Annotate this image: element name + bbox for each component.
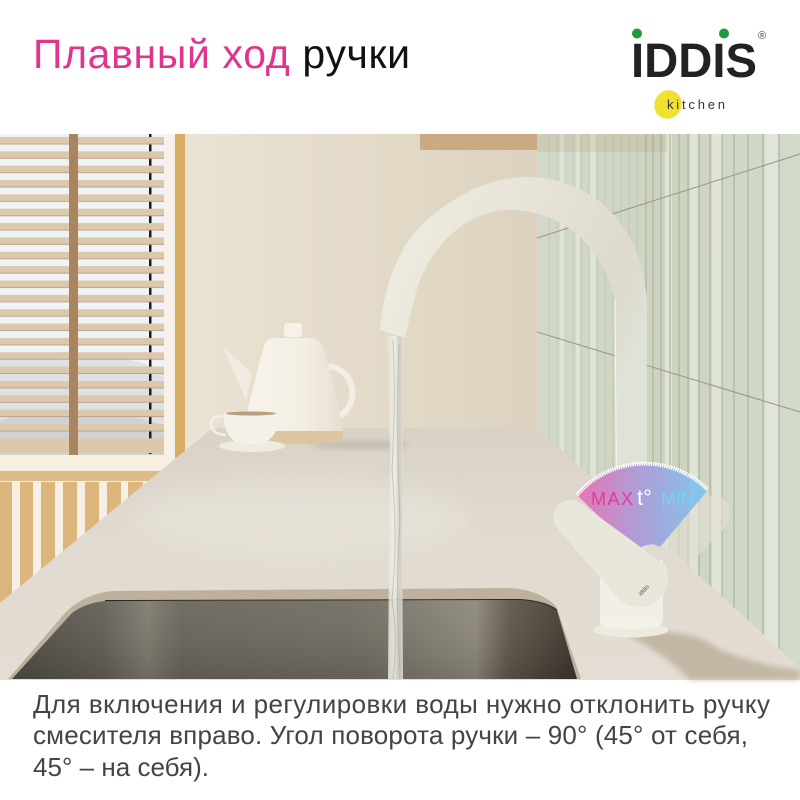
wall [175, 134, 538, 474]
faucet stem highlight [615, 300, 617, 560]
description line 1: Для включения и регулировки воды нужно отклонить ручку [33, 689, 770, 719]
cup saucer [219, 440, 285, 452]
fan temperature label: t° [637, 485, 652, 510]
window view [0, 134, 164, 459]
faucet base [593, 560, 668, 638]
description line 2: смесителя вправо. Угол поворота ручки – 90° (45° от себя, [33, 720, 748, 750]
shelf [420, 134, 553, 150]
cup handle [211, 416, 226, 435]
kettle shadow [310, 441, 410, 449]
fan gradient sector [577, 464, 708, 552]
window cord [149, 134, 152, 454]
logo kitchen word: kitchen [667, 97, 725, 112]
countertop [0, 428, 800, 680]
window frame [0, 134, 185, 472]
cup coffee [226, 412, 276, 416]
coffee cup [211, 412, 285, 452]
kettle handle [322, 367, 353, 424]
photo: kitchen scene [0, 134, 800, 680]
cup body [224, 413, 278, 444]
kettle body [245, 338, 343, 432]
logo registered mark: ® [758, 30, 766, 42]
logo green dots [632, 28, 729, 38]
tile wall [537, 134, 800, 680]
water stream [387, 336, 404, 679]
faucet shadow on counter [625, 632, 800, 680]
sink [8, 588, 581, 679]
logo wordmark: IDDIS [631, 35, 757, 88]
shelf shadow over tiles [537, 134, 667, 152]
ghost handle shape [660, 490, 730, 567]
fan tick arc [577, 464, 708, 495]
sink basin [12, 600, 577, 679]
kettle spout [223, 347, 252, 400]
handle brand mark: iddis [638, 584, 651, 597]
fan MAX label: MAX [591, 489, 633, 509]
kettle lid knob [284, 323, 302, 337]
logo: IDDIS kitchen [631, 28, 766, 124]
description text [33, 689, 770, 782]
kettle base band [270, 431, 343, 444]
sink rim [8, 588, 581, 679]
kettle [223, 323, 353, 444]
faucet spout and stem [380, 177, 647, 560]
title: Плавный ход ручки [33, 31, 410, 77]
logo yellow blob [649, 85, 687, 124]
description line 3: 45° – на себя). [33, 752, 209, 782]
handle [553, 500, 668, 608]
temperature fan [577, 464, 708, 552]
window blinds [0, 134, 164, 456]
lower wooden slats [0, 471, 170, 617]
fan MIN label: MIN [661, 489, 694, 509]
